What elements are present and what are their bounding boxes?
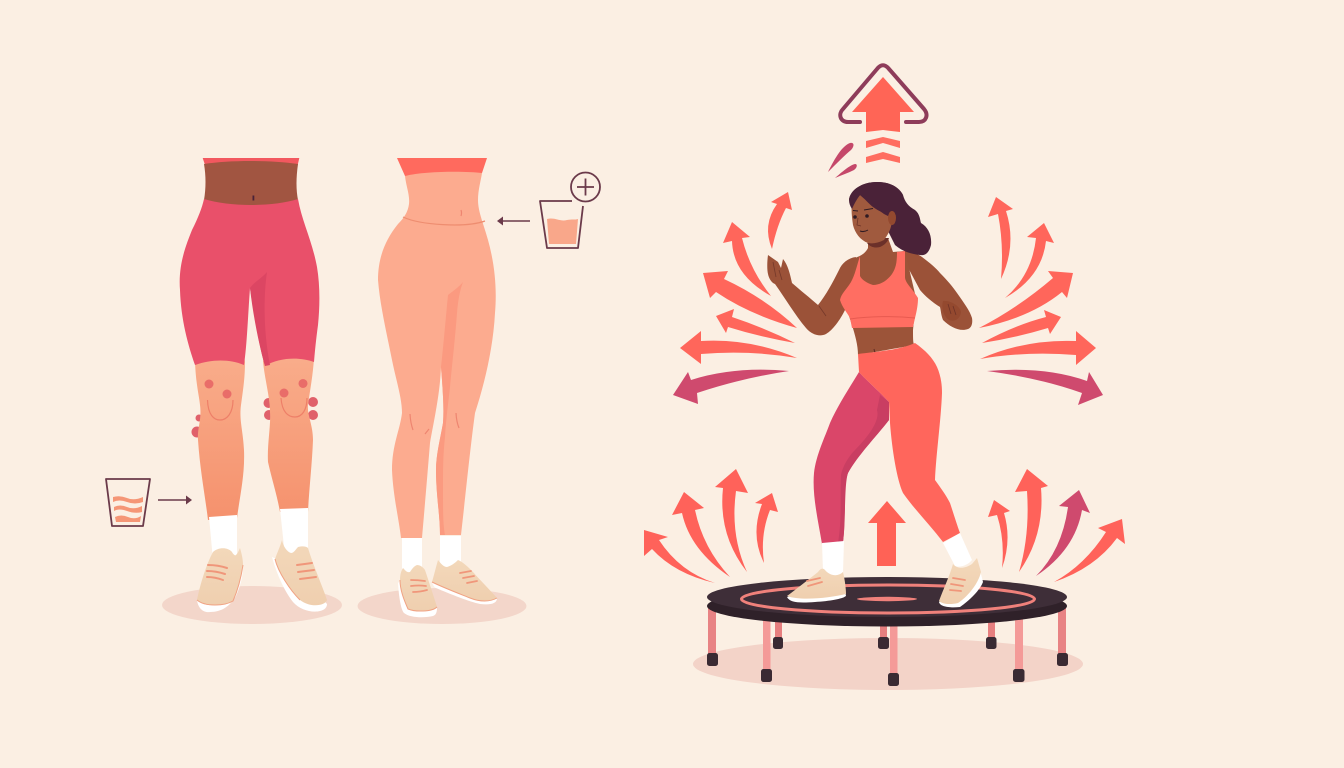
panel: trampoline xyxy=(693,577,1083,690)
socks left figure xyxy=(209,508,308,560)
wavy liquid xyxy=(113,496,143,522)
hand detail xyxy=(773,262,826,316)
front leg leggings xyxy=(858,343,960,542)
trampoline rim xyxy=(707,586,1067,626)
navel and knee creases xyxy=(410,210,462,434)
hair front xyxy=(849,182,903,218)
hair back xyxy=(849,182,931,255)
waist band and midriff xyxy=(203,158,299,168)
trampoline shadow xyxy=(693,638,1083,690)
woman shoe left xyxy=(787,569,846,602)
floor shadow right xyxy=(358,588,526,624)
icon: water glass with plus xyxy=(540,172,600,248)
arrows: lower left fan xyxy=(644,469,778,583)
arrows: lower right fan xyxy=(988,469,1125,582)
body and legs right figure xyxy=(378,165,496,538)
arrow outline xyxy=(840,65,926,122)
torso skin xyxy=(842,238,916,355)
arrow: glass to right waist xyxy=(497,216,530,226)
legs left figure xyxy=(195,348,314,520)
back legs xyxy=(773,620,996,649)
pink shorts xyxy=(180,199,319,366)
navel xyxy=(252,196,254,200)
kneecap outlines xyxy=(208,398,307,420)
icon: bad drink glass xyxy=(106,479,150,526)
plus badge xyxy=(571,172,600,202)
ear xyxy=(888,211,896,225)
right figure shoe right xyxy=(432,560,497,604)
left figure shoe left xyxy=(197,548,243,612)
panel: jumping woman xyxy=(767,182,983,607)
back leg leggings xyxy=(814,372,889,544)
face xyxy=(852,195,892,243)
neck shadow xyxy=(867,238,889,248)
belly button xyxy=(874,349,875,353)
socks right figure xyxy=(402,536,461,572)
arrow: glass to left leg xyxy=(158,496,192,504)
left figure shoe right xyxy=(272,540,327,612)
mat centre bar xyxy=(857,597,917,601)
right figure shoe left xyxy=(398,565,437,617)
inner thigh shade right figure xyxy=(436,282,463,535)
arrows: upper left fan xyxy=(673,192,797,404)
eyes, nose and smile xyxy=(853,208,873,232)
back leg shade xyxy=(838,395,889,543)
glass outline xyxy=(540,201,583,248)
waistline detail xyxy=(403,217,485,225)
front legs xyxy=(707,607,1068,686)
icon: big up arrow in outline xyxy=(828,65,926,178)
trampoline mat xyxy=(707,577,1067,617)
front arm and hand xyxy=(767,255,856,335)
panel: left figure with cellulite and shorts xyxy=(162,158,342,624)
arrows: upper right fan xyxy=(979,197,1103,405)
mat ring xyxy=(742,585,1034,613)
woman shoe right xyxy=(939,558,983,607)
glass liquid xyxy=(547,219,578,244)
chevrons xyxy=(866,137,900,148)
floor shadow left xyxy=(162,586,342,624)
bra band line xyxy=(850,317,915,319)
solid up arrow xyxy=(852,77,914,132)
top band right figure xyxy=(397,158,487,176)
arrow: centre up arrow xyxy=(868,501,906,566)
knee swelling bumps xyxy=(192,397,318,438)
socks woman xyxy=(822,533,972,576)
sports bra xyxy=(840,251,918,328)
knee dots xyxy=(204,379,308,398)
motion swooshes xyxy=(828,143,854,172)
panel: right figure slim xyxy=(358,158,526,624)
inner thigh shade xyxy=(250,272,270,366)
back arm xyxy=(905,251,972,330)
fist xyxy=(942,301,961,321)
